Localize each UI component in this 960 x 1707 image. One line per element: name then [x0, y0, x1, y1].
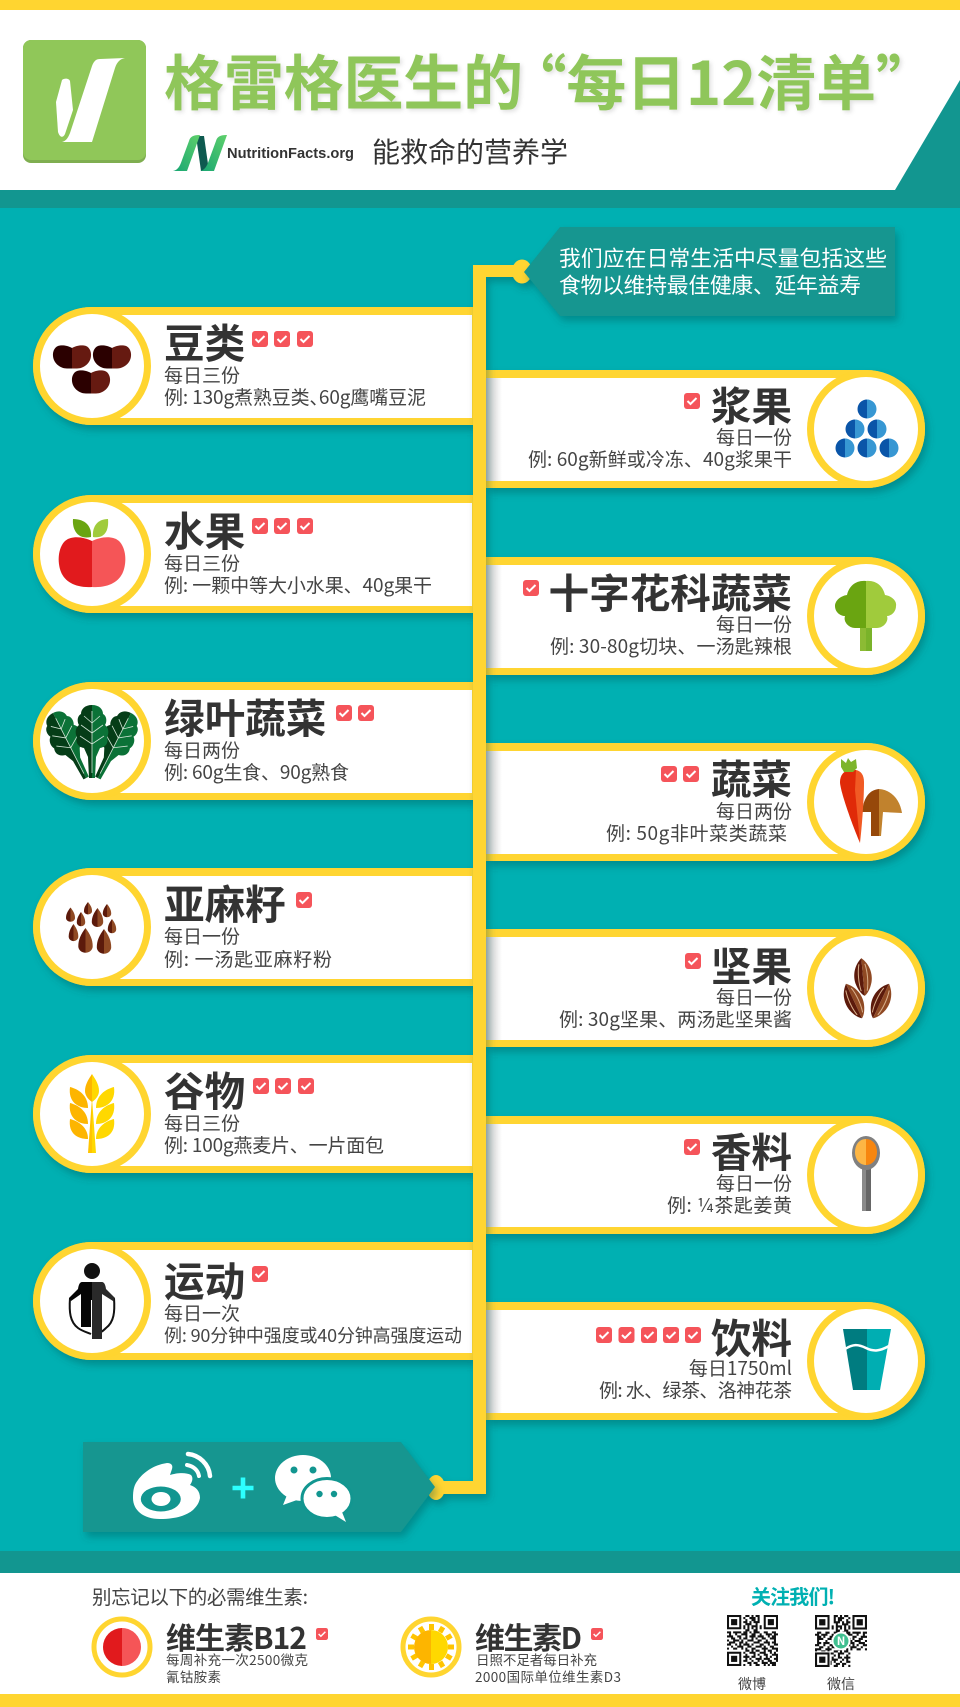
servings checkbox: [685, 953, 701, 969]
wechat label: 微信: [827, 1674, 855, 1694]
panel: greens: [33, 682, 473, 800]
example: 例: 30g坚果、两汤匙坚果酱: [559, 1005, 792, 1032]
panel: beans: [33, 307, 473, 425]
vitamin D description: 2000国际单位维生素D3: [475, 1666, 621, 1686]
banner: social icons: [83, 1442, 435, 1532]
panel: vegetables: [486, 743, 925, 861]
panel: fruit: [33, 495, 473, 613]
icon: glass of water: [843, 1329, 891, 1390]
example: 例: 一颗中等大小水果、40g果干: [164, 571, 432, 598]
icon: kale: [38, 705, 146, 785]
example: 例: ¼茶匙姜黄: [667, 1191, 792, 1218]
heading: B12: 维生素B12: [166, 1614, 307, 1658]
panel: exercise: [33, 1242, 473, 1360]
icon: spoon: [852, 1136, 880, 1211]
servings checkboxes: [253, 1078, 314, 1094]
servings: 每日一份: [716, 610, 792, 637]
icon: green check logo: [23, 40, 146, 163]
servings checkboxes: [252, 331, 313, 347]
B12 checkbox: [316, 1628, 328, 1640]
callout: daily intake note: 食物以维持最佳健康、延年益寿: [559, 269, 861, 300]
servings: 每日一份: [164, 922, 240, 949]
heading: 绿叶蔬菜: [164, 686, 326, 745]
icon: sun: [403, 1619, 459, 1675]
servings: 每日一份: [716, 983, 792, 1010]
B12 description: 氰钴胺素: [166, 1666, 221, 1686]
example: 例: 50g非叶菜类蔬菜: [606, 819, 787, 846]
B12 description: [166, 1649, 308, 1686]
example: 例: 60g生食、90g熟食: [164, 758, 349, 785]
servings checkbox: [252, 1266, 268, 1282]
footer strip: [0, 1551, 960, 1573]
servings checkboxes: [252, 518, 313, 534]
panel: beverages: [486, 1302, 925, 1420]
panel: spices: [486, 1116, 925, 1234]
servings checkbox: [296, 892, 312, 908]
example: 例: 60g新鲜或冷冻、40g浆果干: [528, 445, 792, 472]
icon: blueberries: [836, 400, 898, 458]
servings: 每日一次: [164, 1299, 240, 1326]
title: 格雷格医生的 “每日12清单”: [164, 36, 906, 123]
QR code: weibo: [726, 1614, 779, 1667]
panel: grains: [33, 1055, 473, 1173]
icon: apple: [59, 519, 125, 587]
example: 例: 100g燕麦片、一片面包: [164, 1131, 384, 1158]
subtitle: 能救命的营养学: [372, 131, 568, 171]
heading: 运动: [164, 1249, 245, 1308]
timeline pipe: [427, 260, 532, 1500]
footer panel: [0, 1573, 960, 1707]
heading: 坚果: [711, 934, 792, 993]
weibo label: 微博: [738, 1674, 766, 1694]
icon: B12: [94, 1619, 150, 1675]
callout: daily intake note: [524, 227, 895, 316]
icon: jump rope: [69, 1263, 115, 1339]
servings checkbox: [684, 1139, 700, 1155]
heading: 十字花科蔬菜: [549, 561, 792, 620]
B12 description: 每周补充一次2500微克: [166, 1649, 308, 1669]
servings: 每日两份: [164, 736, 240, 763]
servings checkboxes: [336, 705, 374, 721]
QR code: wechat: [814, 1614, 868, 1668]
QR code: wechat: N: [837, 1633, 845, 1649]
panel: cruciferous: [486, 557, 925, 675]
follow us: 关注我们!: [751, 1581, 835, 1610]
supplements intro: 别忘记以下的必需维生素:: [92, 1581, 308, 1610]
panel: flaxseed: [33, 868, 473, 986]
servings checkbox: [684, 393, 700, 409]
servings: 每日一份: [716, 423, 792, 450]
heading: 谷物: [164, 1059, 245, 1118]
icon: carrot and mushroom: [840, 758, 902, 843]
heading: 饮料: [711, 1306, 792, 1365]
servings checkbox: [523, 580, 539, 596]
heading: 浆果: [711, 374, 792, 433]
servings checkboxes: [596, 1327, 701, 1343]
servings checkboxes: [661, 766, 699, 782]
icon: nuts: [838, 957, 897, 1022]
vitamin D description: 日照不足者每日补充: [476, 1649, 597, 1669]
servings: 每日1750ml: [689, 1354, 792, 1381]
icon: wechat: [275, 1455, 352, 1522]
vitamin D description: [475, 1649, 621, 1686]
heading: 豆类: [164, 311, 245, 370]
heading: 水果: [164, 499, 245, 558]
heading: 亚麻籽: [164, 872, 286, 931]
logo wordmark: NutritionFacts.org: [227, 145, 354, 162]
header panel: [0, 0, 960, 208]
example: 例: 30-80g切块、一汤匙辣根: [550, 632, 792, 659]
icon: broccoli: [835, 581, 896, 651]
heading: 蔬菜: [711, 747, 792, 806]
example: 例: 90分钟中强度或40分钟高强度运动: [164, 1322, 462, 1348]
servings: 每日三份: [164, 361, 240, 388]
icon: weibo: [133, 1454, 210, 1519]
heading: 香料: [711, 1120, 792, 1179]
servings: 每日两份: [716, 797, 792, 824]
example: 例: 一汤匙亚麻籽粉: [164, 945, 332, 972]
icon: flax seeds: [66, 902, 116, 954]
icon: NutritionFacts logo: [173, 135, 227, 171]
example: 例: 130g煮熟豆类、60g鹰嘴豆泥: [164, 383, 426, 410]
servings: 每日三份: [164, 1109, 240, 1136]
panel: nuts: [486, 929, 925, 1047]
servings: 每日三份: [164, 549, 240, 576]
icon: plus: [232, 1478, 254, 1498]
icon: beans: [53, 345, 131, 394]
callout: daily intake note: 我们应在日常生活中尽量包括这些: [559, 242, 887, 273]
servings: 每日一份: [716, 1169, 792, 1196]
heading: vitamin D: 维生素D: [475, 1614, 582, 1658]
vitamin D checkbox: [591, 1628, 603, 1640]
icon: wheat: [70, 1074, 114, 1153]
example: 例: 水、绿茶、洛神花茶: [599, 1376, 792, 1403]
panel: berries: [486, 370, 925, 488]
